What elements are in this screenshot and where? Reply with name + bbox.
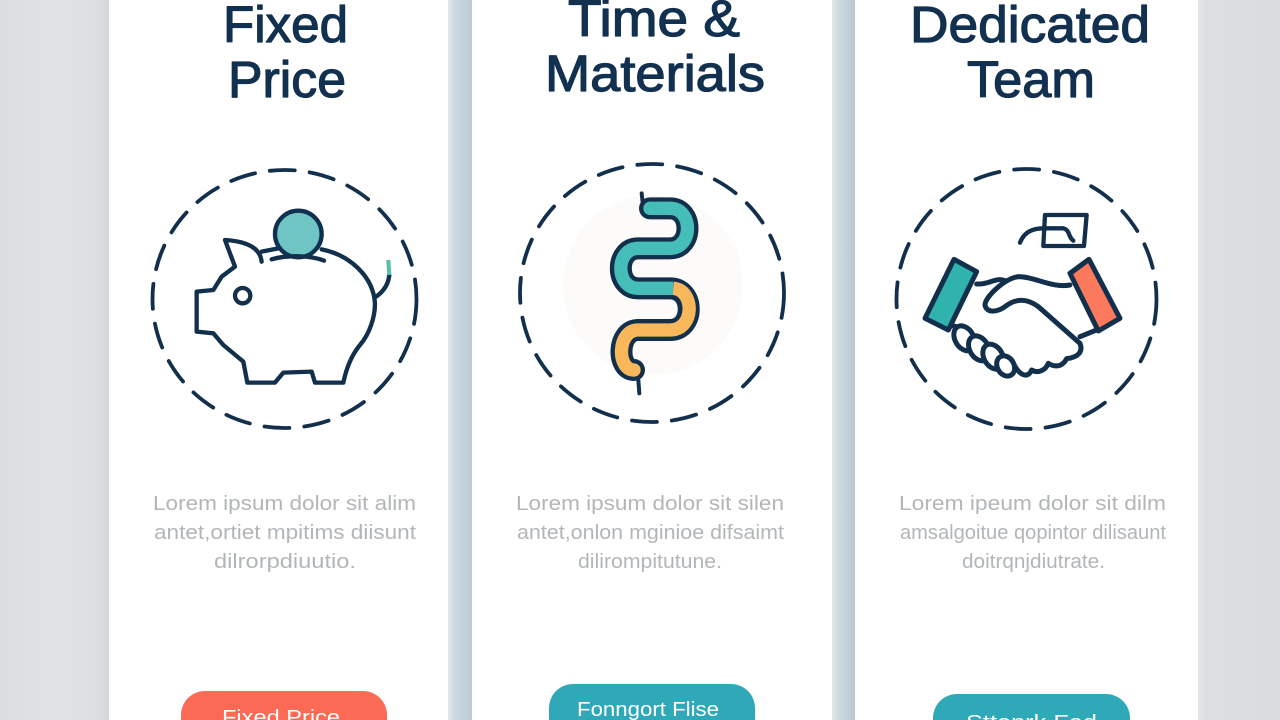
description text: amsalgoitue qopintor dilisaunt [900, 522, 1166, 544]
description text: Lorem ipsum dolor sit alim [153, 493, 416, 515]
icon: piggy bank in dashed circle [152, 170, 416, 428]
description text: dilirompitutune. [578, 551, 722, 573]
button: teal [933, 694, 1130, 720]
description text: antet,ortiet mpitims diisunt [154, 522, 416, 544]
heading: time and materials: Materials [545, 45, 765, 102]
description text: Lorem ipsum dolor sit silen [516, 493, 784, 515]
heading: fixed price [223, 0, 348, 108]
description text [899, 493, 1166, 573]
description text: doitrqnjdiutrate. [962, 551, 1105, 573]
panel: fixed price [109, 0, 448, 720]
panel: time and materials [472, 0, 832, 720]
button: coral [181, 691, 387, 720]
heading: fixed price: Price [228, 51, 346, 108]
description text [516, 493, 784, 573]
icon: handshake in dashed circle [896, 169, 1156, 429]
description text [153, 493, 416, 573]
heading: time and materials [545, 0, 765, 102]
description text: antet,onlon mginioe difsaimt [517, 522, 784, 544]
heading: dedicated team: Team [967, 51, 1095, 108]
panel: dedicated team [855, 0, 1198, 720]
description text: dilrorpdiuutio. [214, 551, 356, 573]
button: teal [549, 684, 755, 720]
heading: dedicated team [910, 0, 1150, 108]
description text: Lorem ipeum dolor sit dilm [899, 493, 1166, 515]
icon: winding path in dashed circle [520, 164, 784, 422]
